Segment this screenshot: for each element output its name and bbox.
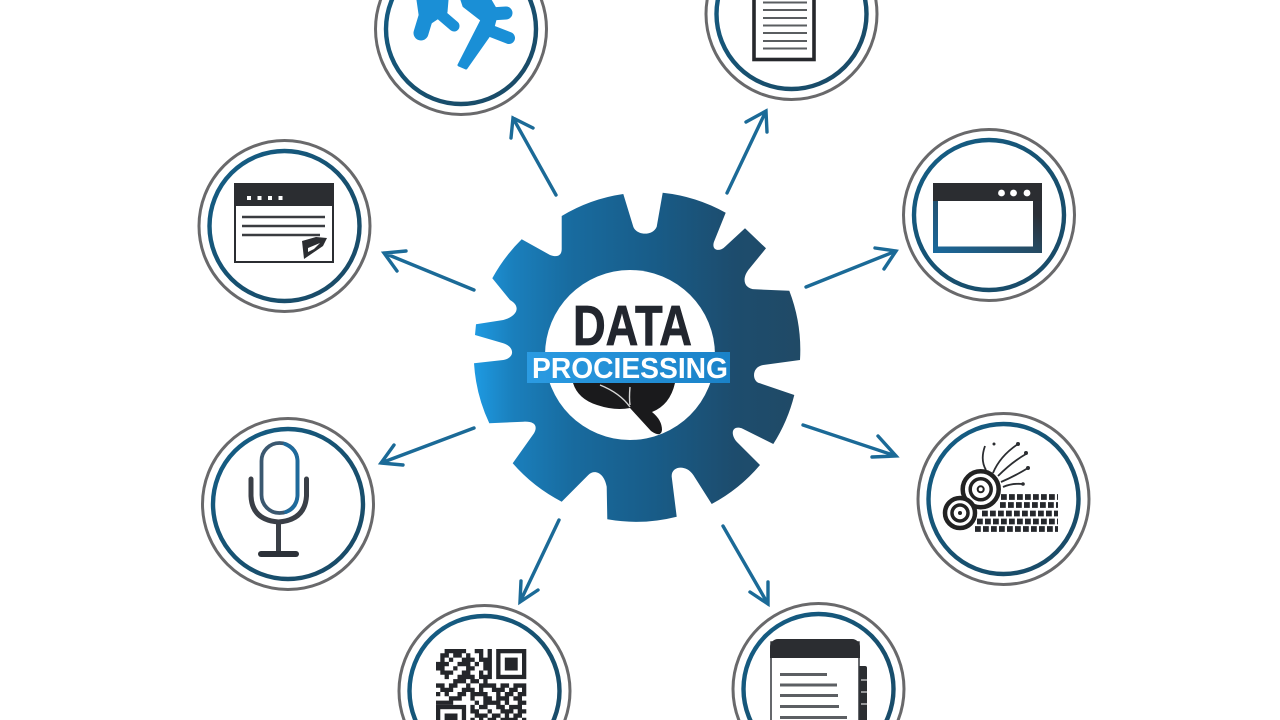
- arrow: to lower right icon: [803, 425, 896, 457]
- heading band: PROCESSING: PROCIESSING: [532, 353, 728, 385]
- node: lower left microphone icon: [202, 418, 374, 590]
- gear body: [474, 193, 800, 522]
- arrow: to bottom right icon: [723, 526, 768, 604]
- heading: DATA: DATA: [573, 294, 692, 358]
- central gear: [474, 193, 800, 522]
- gear centre hole: [545, 270, 715, 440]
- icon: QR code: [436, 651, 526, 720]
- node: top left blue icon: [376, 0, 546, 114]
- arrow: to top right icon: [727, 111, 767, 193]
- arrow: to left icon: [384, 251, 474, 290]
- node: right browser window icon: [904, 130, 1074, 300]
- arrow: to right icon: [806, 248, 896, 287]
- arrow: to top left icon: [511, 118, 556, 195]
- node: bottom right notebook icon: [733, 604, 904, 720]
- arrow: to bottom left icon: [520, 520, 559, 602]
- icon: blue network shapes: [418, 0, 509, 68]
- leaf icon in gear centre: [573, 383, 675, 434]
- icon: application window: [933, 183, 1042, 253]
- icon: notebook with tabs: [770, 639, 867, 720]
- node: bottom left QR code icon: [399, 606, 570, 720]
- icon: microphone: [251, 443, 306, 554]
- node: left browser form icon: [199, 140, 370, 312]
- arrow: to lower left icon: [381, 428, 474, 465]
- icon: browser window with cursor: [234, 183, 334, 262]
- icon: document: [754, 0, 814, 60]
- icon: fibres, spirals and grid: [945, 442, 1058, 529]
- node: lower right fibre and grid icon: [918, 414, 1089, 584]
- node: top right document icon: [706, 0, 877, 100]
